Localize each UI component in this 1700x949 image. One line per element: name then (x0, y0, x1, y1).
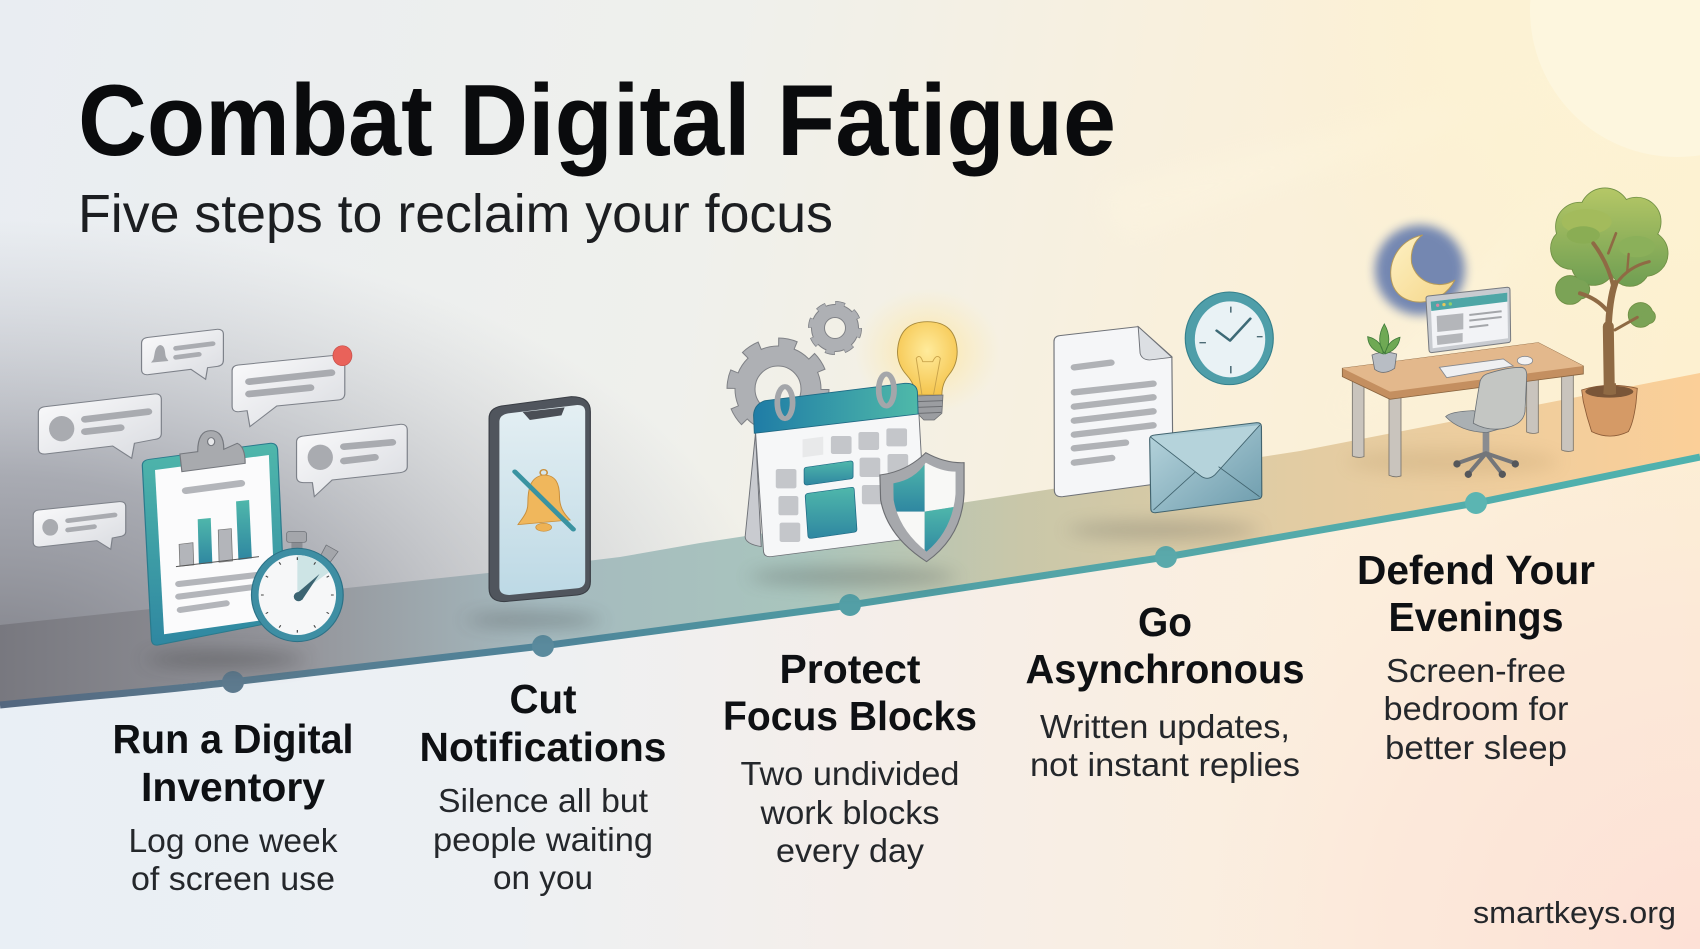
step 5 text: bedroom for (1384, 690, 1568, 727)
icon: phone with muted bell (467, 397, 601, 627)
stopwatch (251, 532, 343, 642)
step 1 text (112, 716, 354, 897)
step 1 text: Log one week (128, 822, 338, 859)
step 2 text: Silence all but (438, 782, 648, 819)
step 3 text: every day (776, 832, 925, 869)
step 2 text: Cut (510, 676, 577, 722)
bubble: large left (38, 394, 161, 458)
keyboard and mouse (1439, 356, 1533, 378)
step 3 text: work blocks (759, 794, 940, 831)
wall clock (1185, 292, 1273, 385)
rising path band (0, 373, 1700, 705)
monitor (1426, 287, 1511, 353)
bubble: right (297, 424, 407, 497)
moon (1375, 225, 1465, 315)
bubble: lower left (33, 502, 126, 549)
tree in pot (1551, 188, 1668, 436)
step 3 text (723, 646, 977, 869)
step 2 text: on you (493, 859, 593, 896)
potted plant (1368, 324, 1400, 372)
source credit: smartkeys.org (1473, 895, 1676, 930)
step 1 text: of screen use (131, 860, 335, 897)
step 3 text: Protect (780, 646, 921, 692)
progress line with step dots (0, 457, 1700, 705)
bubble: alert with red dot (232, 346, 352, 427)
calendar (745, 374, 926, 557)
step 4 text: Asynchronous (1026, 646, 1304, 692)
step 4 text: Written updates, (1040, 708, 1290, 745)
title: Combat Digital Fatigue (78, 65, 1116, 177)
icon: calendar, light bulb and shield (745, 288, 1000, 586)
step 1 text: Run a Digital (112, 716, 354, 762)
clipboard (142, 431, 285, 645)
step 2 text: Notifications (420, 724, 666, 770)
step 4 text (1026, 599, 1304, 783)
chair (1446, 367, 1527, 478)
sun (1247, 0, 1700, 440)
icon: gears (732, 304, 859, 435)
step 2 text: people waiting (433, 821, 653, 858)
step 5 text: Evenings (1388, 594, 1564, 640)
desk (1342, 343, 1583, 477)
shield (880, 453, 964, 562)
envelope (1150, 423, 1262, 513)
step 4 text: not instant replies (1030, 746, 1300, 783)
step 3 text: Focus Blocks (723, 693, 977, 739)
subtitle: Five steps to reclaim your focus (78, 184, 833, 244)
icon: desk scene with moon, monitor and tree (1342, 188, 1668, 478)
bubble: bell notification (142, 329, 223, 379)
step 5 text: better sleep (1385, 729, 1567, 766)
step 5 text (1357, 547, 1595, 766)
muted bell (515, 470, 573, 531)
icon: speech bubbles, clipboard and stopwatch (33, 329, 407, 668)
step 2 text (420, 676, 666, 896)
step 5 text: Defend Your (1357, 547, 1595, 593)
step 1 text: Inventory (141, 764, 325, 810)
step 5 text: Screen-free (1386, 652, 1566, 689)
step 4 text: Go (1138, 599, 1192, 645)
light bulb (855, 288, 1000, 420)
step 3 text: Two undivided (740, 755, 960, 792)
icon: document, envelope and clock (1054, 292, 1273, 539)
document (1054, 327, 1173, 497)
